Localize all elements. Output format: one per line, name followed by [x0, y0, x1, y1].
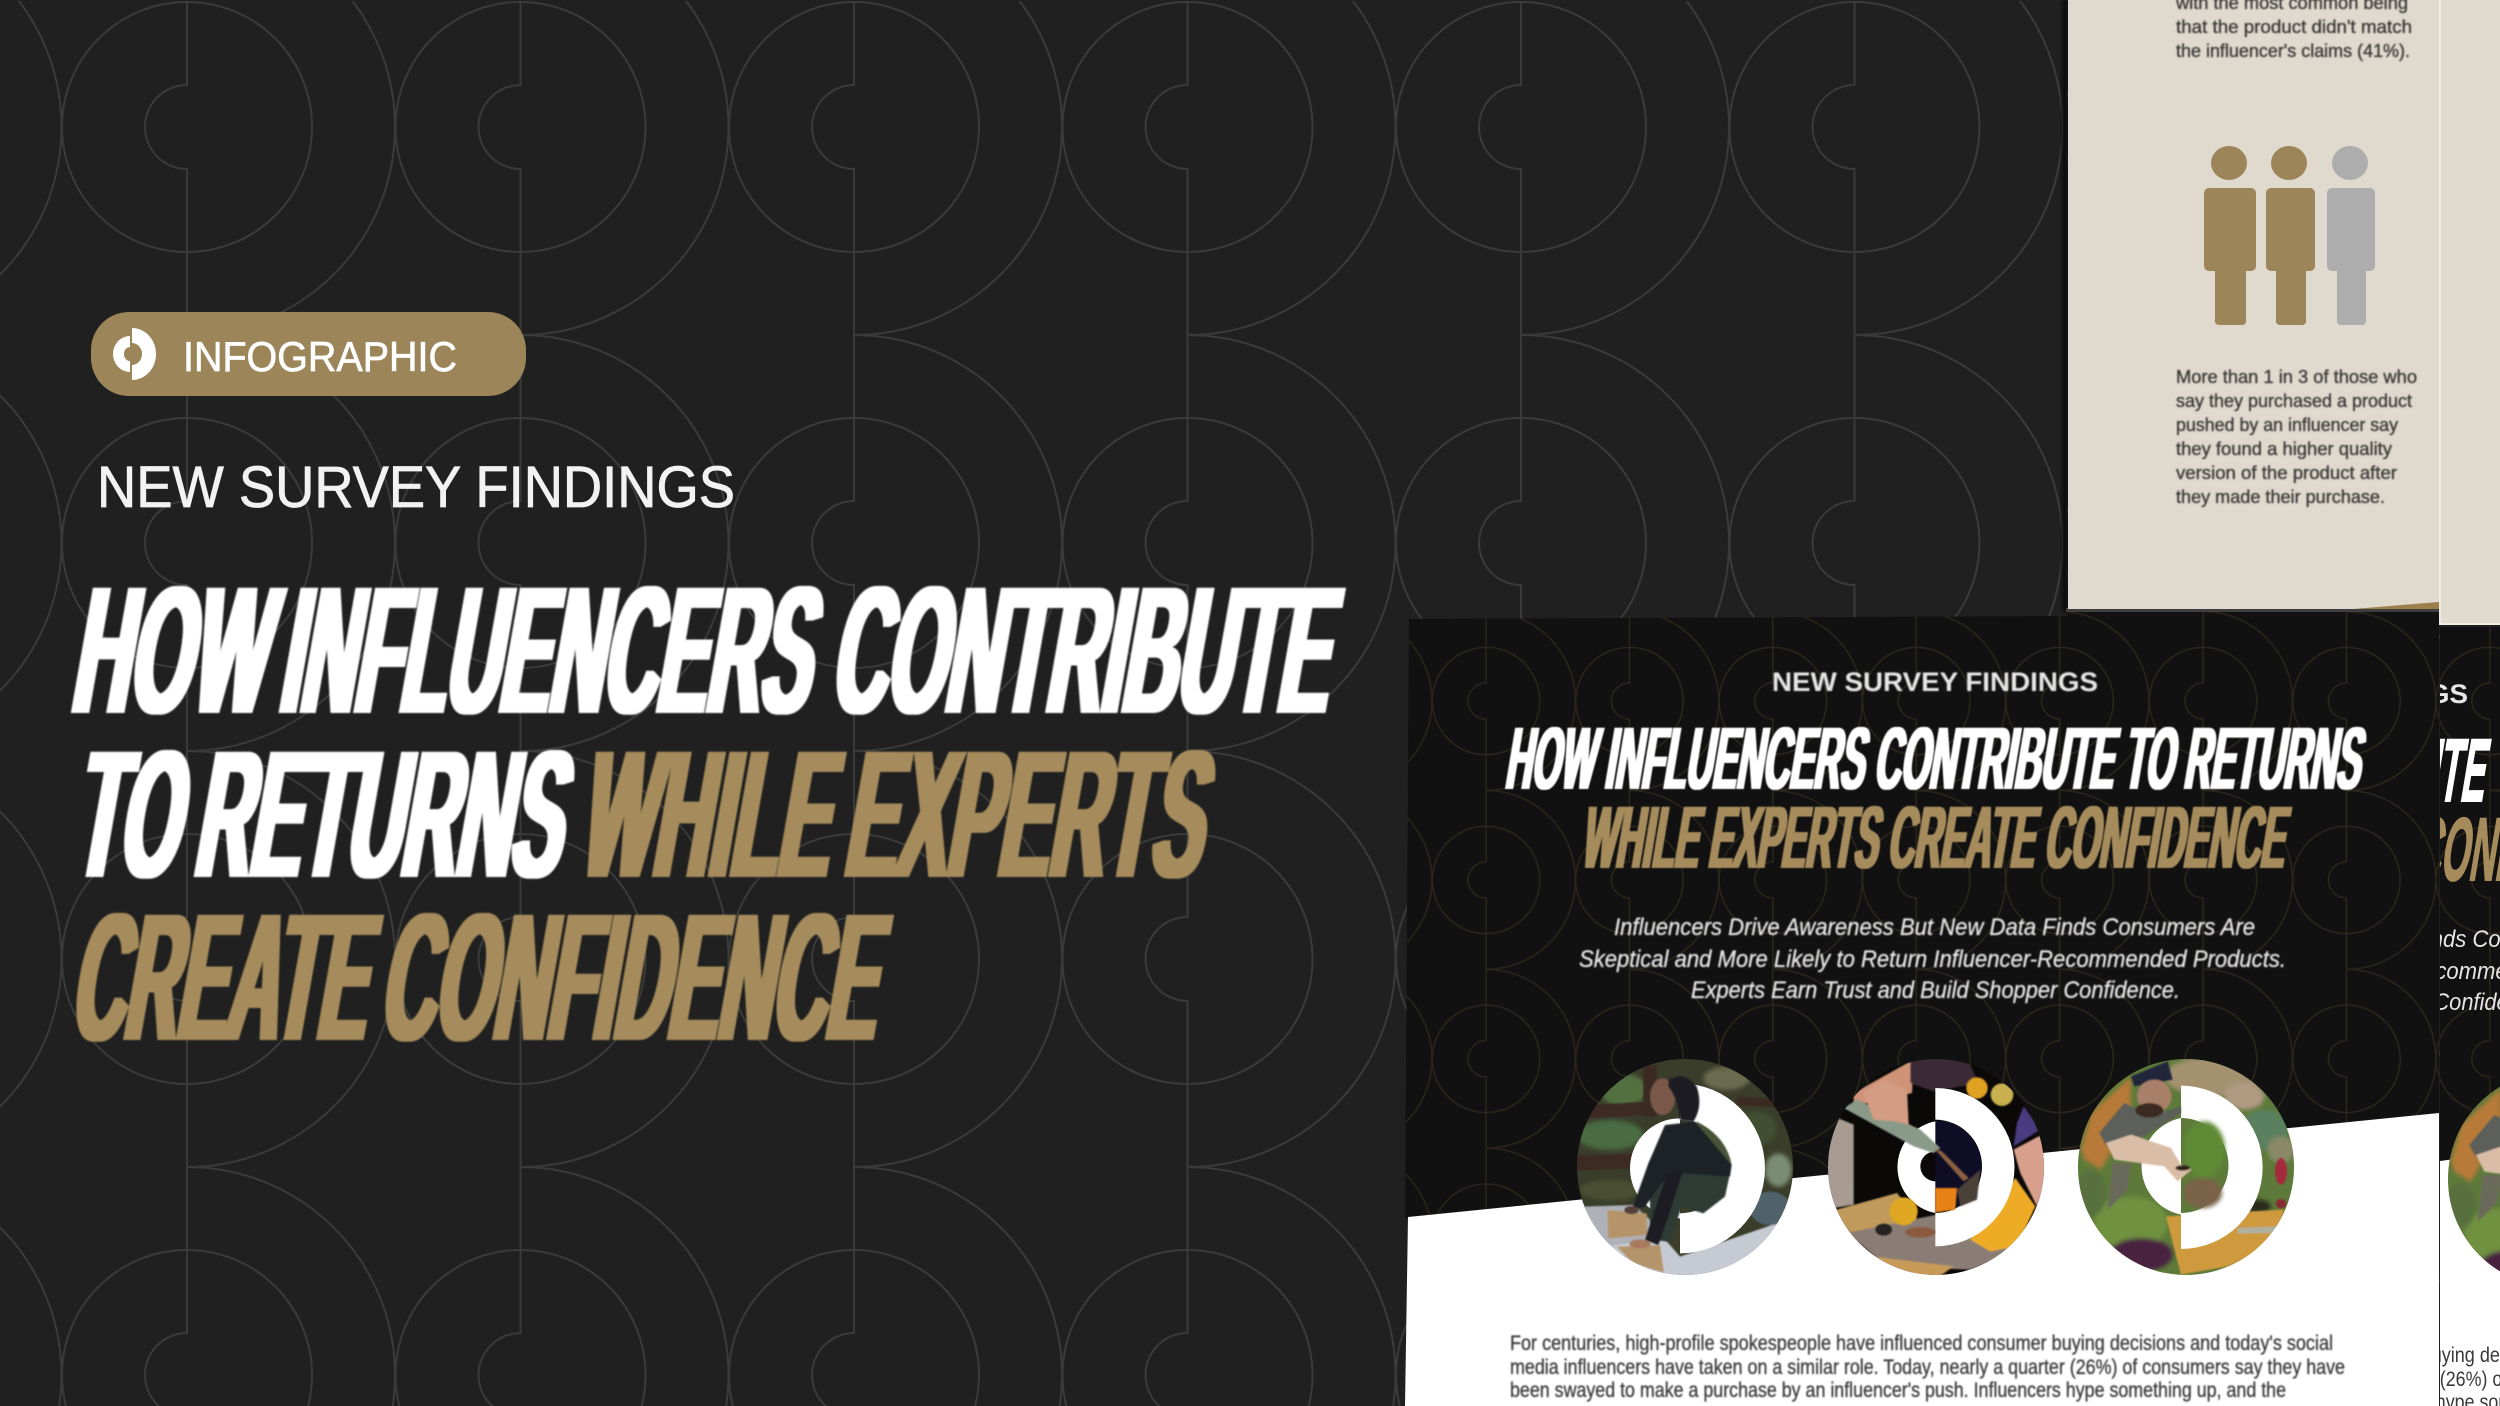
preview subtitle: Skeptical and More Likely to Return Influencer-Recommended Products.: [1579, 946, 2286, 973]
stat text 2: say they purchased a product: [2176, 391, 2412, 411]
panel: dark infographic preview: [1405, 608, 2439, 1406]
photo circle: gardener: [2068, 1046, 2308, 1286]
stat text 1: that the product didn't match: [2176, 17, 2412, 37]
preview eyebrow: NEW SURVEY FINDINGS: [1772, 667, 2098, 697]
white lower section: [1405, 1113, 2439, 1406]
icon: three people, two gold one grey: [2204, 146, 2375, 325]
body paragraph: media influencers have taken on a similar role. Today, nearly a quarter (26%) of consumers say they have: [1510, 1356, 2345, 1379]
eyebrow: new survey findings: NEW SURVEY FINDINGS: [97, 455, 735, 520]
preview subtitle: Influencers Drive Awareness But New Data Finds Consumers Are: [1614, 914, 2255, 941]
body paragraph: For centuries, high-profile spokespeople have influenced consumer buying decisions and today's social: [1510, 1332, 2333, 1355]
photo circle: woman stretching: [1577, 1059, 1793, 1275]
title: white words: HOW: [62, 548, 292, 752]
stat text 1: [2175, 0, 2412, 61]
stat text 2: pushed by an influencer say: [2176, 415, 2398, 435]
body paragraph: [1510, 1332, 2345, 1402]
title: [62, 548, 1354, 1079]
badge: INFOGRAPHIC pill: [91, 312, 526, 396]
preview subtitle: Experts Earn Trust and Build Shopper Confidence.: [1691, 977, 2180, 1004]
title: EXPERTS: [835, 712, 1228, 916]
cropped duplicate content: NEW SURVEY FINDINGS: [2142, 679, 2468, 709]
panel: cream stat page: [2062, 0, 2439, 612]
stat text 2: More than 1 in 3 of those who: [2176, 367, 2417, 387]
title: white words: TO: [64, 712, 205, 916]
stat text 2: [2176, 367, 2417, 507]
badge label: INFOGRAPHIC: [183, 333, 457, 380]
stat text 2: version of the product after: [2176, 463, 2397, 483]
panel: right-hand page, cropped: [2439, 0, 2500, 1406]
title: gold words: CONFIDENCE: [371, 875, 902, 1079]
cropped duplicate content: [2440, 684, 2500, 1406]
title: gold words: [62, 712, 1228, 1079]
photo circle: pouring bottle: [1828, 1059, 2044, 1275]
body paragraph: been swayed to make a purchase by an influencer's push. Influencers hype something up, and the: [1510, 1379, 2286, 1402]
title: gold words: CREATE: [62, 875, 392, 1079]
stat text 2: they found a higher quality: [2176, 439, 2392, 459]
text: CONTRIBUTE: [822, 548, 1354, 752]
title: gold words: WHILE: [570, 712, 855, 916]
title: white words: INFLUENCERS: [270, 548, 836, 752]
title: white words: [62, 548, 1354, 916]
stat text 1: the influencer's claims (41%).: [2176, 41, 2410, 61]
title: white words: RETURNS: [185, 712, 587, 916]
stat text 2: they made their purchase.: [2176, 487, 2385, 507]
preview subtitle: [1579, 914, 2286, 1004]
gold wedge: [2353, 602, 2439, 609]
icon: brand mark: [113, 328, 156, 380]
